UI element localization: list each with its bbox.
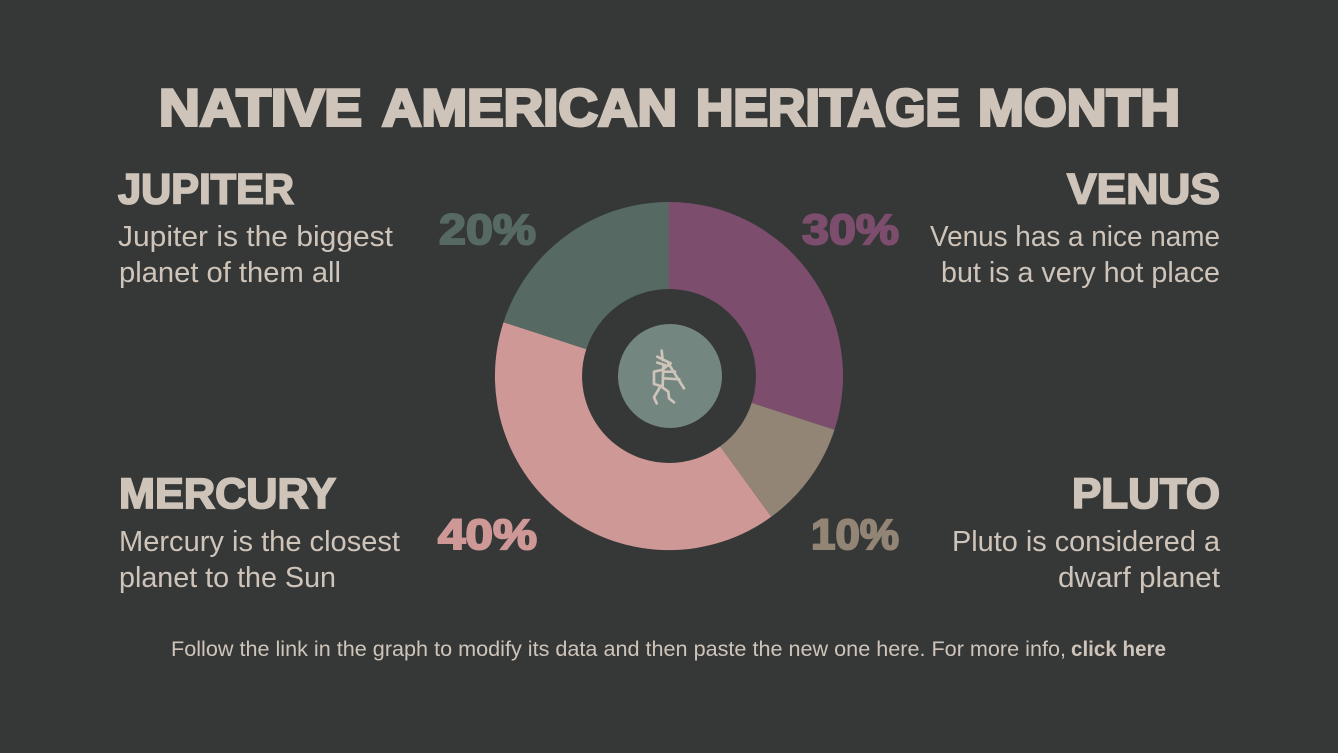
panel: Mercury	[119, 470, 400, 594]
heading: Pluto: PLUTO	[1072, 470, 1220, 518]
text: Jupiter description: Jupiter is the biggest	[118, 221, 393, 253]
title	[159, 80, 1180, 138]
title: MONTH	[978, 80, 1180, 138]
text: Pluto description	[952, 526, 1221, 594]
text: Pluto description: dwarf planet	[1058, 562, 1220, 594]
text: Venus description: Venus has a nice name	[930, 221, 1220, 253]
segment: Jupiter 20%	[504, 202, 669, 349]
text: Pluto description: Pluto is considered a	[952, 526, 1221, 558]
heading: Venus: VENUS	[1067, 166, 1220, 214]
footer note: Follow the link in the graph to modify its data and then paste the new one here. For more info,	[171, 638, 1066, 661]
segment: Venus 30%	[669, 202, 843, 430]
icon: native figure with spear	[654, 351, 684, 403]
segment: Pluto 10%	[720, 403, 834, 517]
text: Mercury description: planet to the Sun	[119, 562, 336, 594]
text: Jupiter description	[118, 221, 393, 289]
text: Mercury description: Mercury is the closest	[119, 526, 400, 558]
panel: Jupiter	[118, 166, 393, 289]
percentage: 30%: 30%	[802, 206, 899, 254]
title: NATIVE	[159, 80, 362, 138]
title: HERITAGE	[696, 80, 960, 138]
percentage: 10%: 10%	[811, 511, 899, 559]
footer note: click here	[1071, 638, 1166, 661]
panel: Pluto	[952, 470, 1221, 594]
donut chart	[495, 202, 843, 550]
heading: Jupiter: JUPITER	[118, 166, 294, 214]
title: AMERICAN	[382, 80, 677, 138]
text: Jupiter description: planet of them all	[119, 257, 341, 289]
text: Venus description	[930, 221, 1220, 289]
segment: Mercury 40%	[495, 322, 771, 550]
heading: Mercury: MERCURY	[119, 470, 336, 518]
panel: Venus	[930, 166, 1220, 289]
text: Venus description: but is a very hot place	[941, 257, 1220, 289]
center circle	[618, 324, 722, 428]
percentage: 40%: 40%	[438, 511, 537, 559]
percentage: 20%: 20%	[439, 206, 536, 254]
text: Mercury description	[119, 526, 400, 594]
